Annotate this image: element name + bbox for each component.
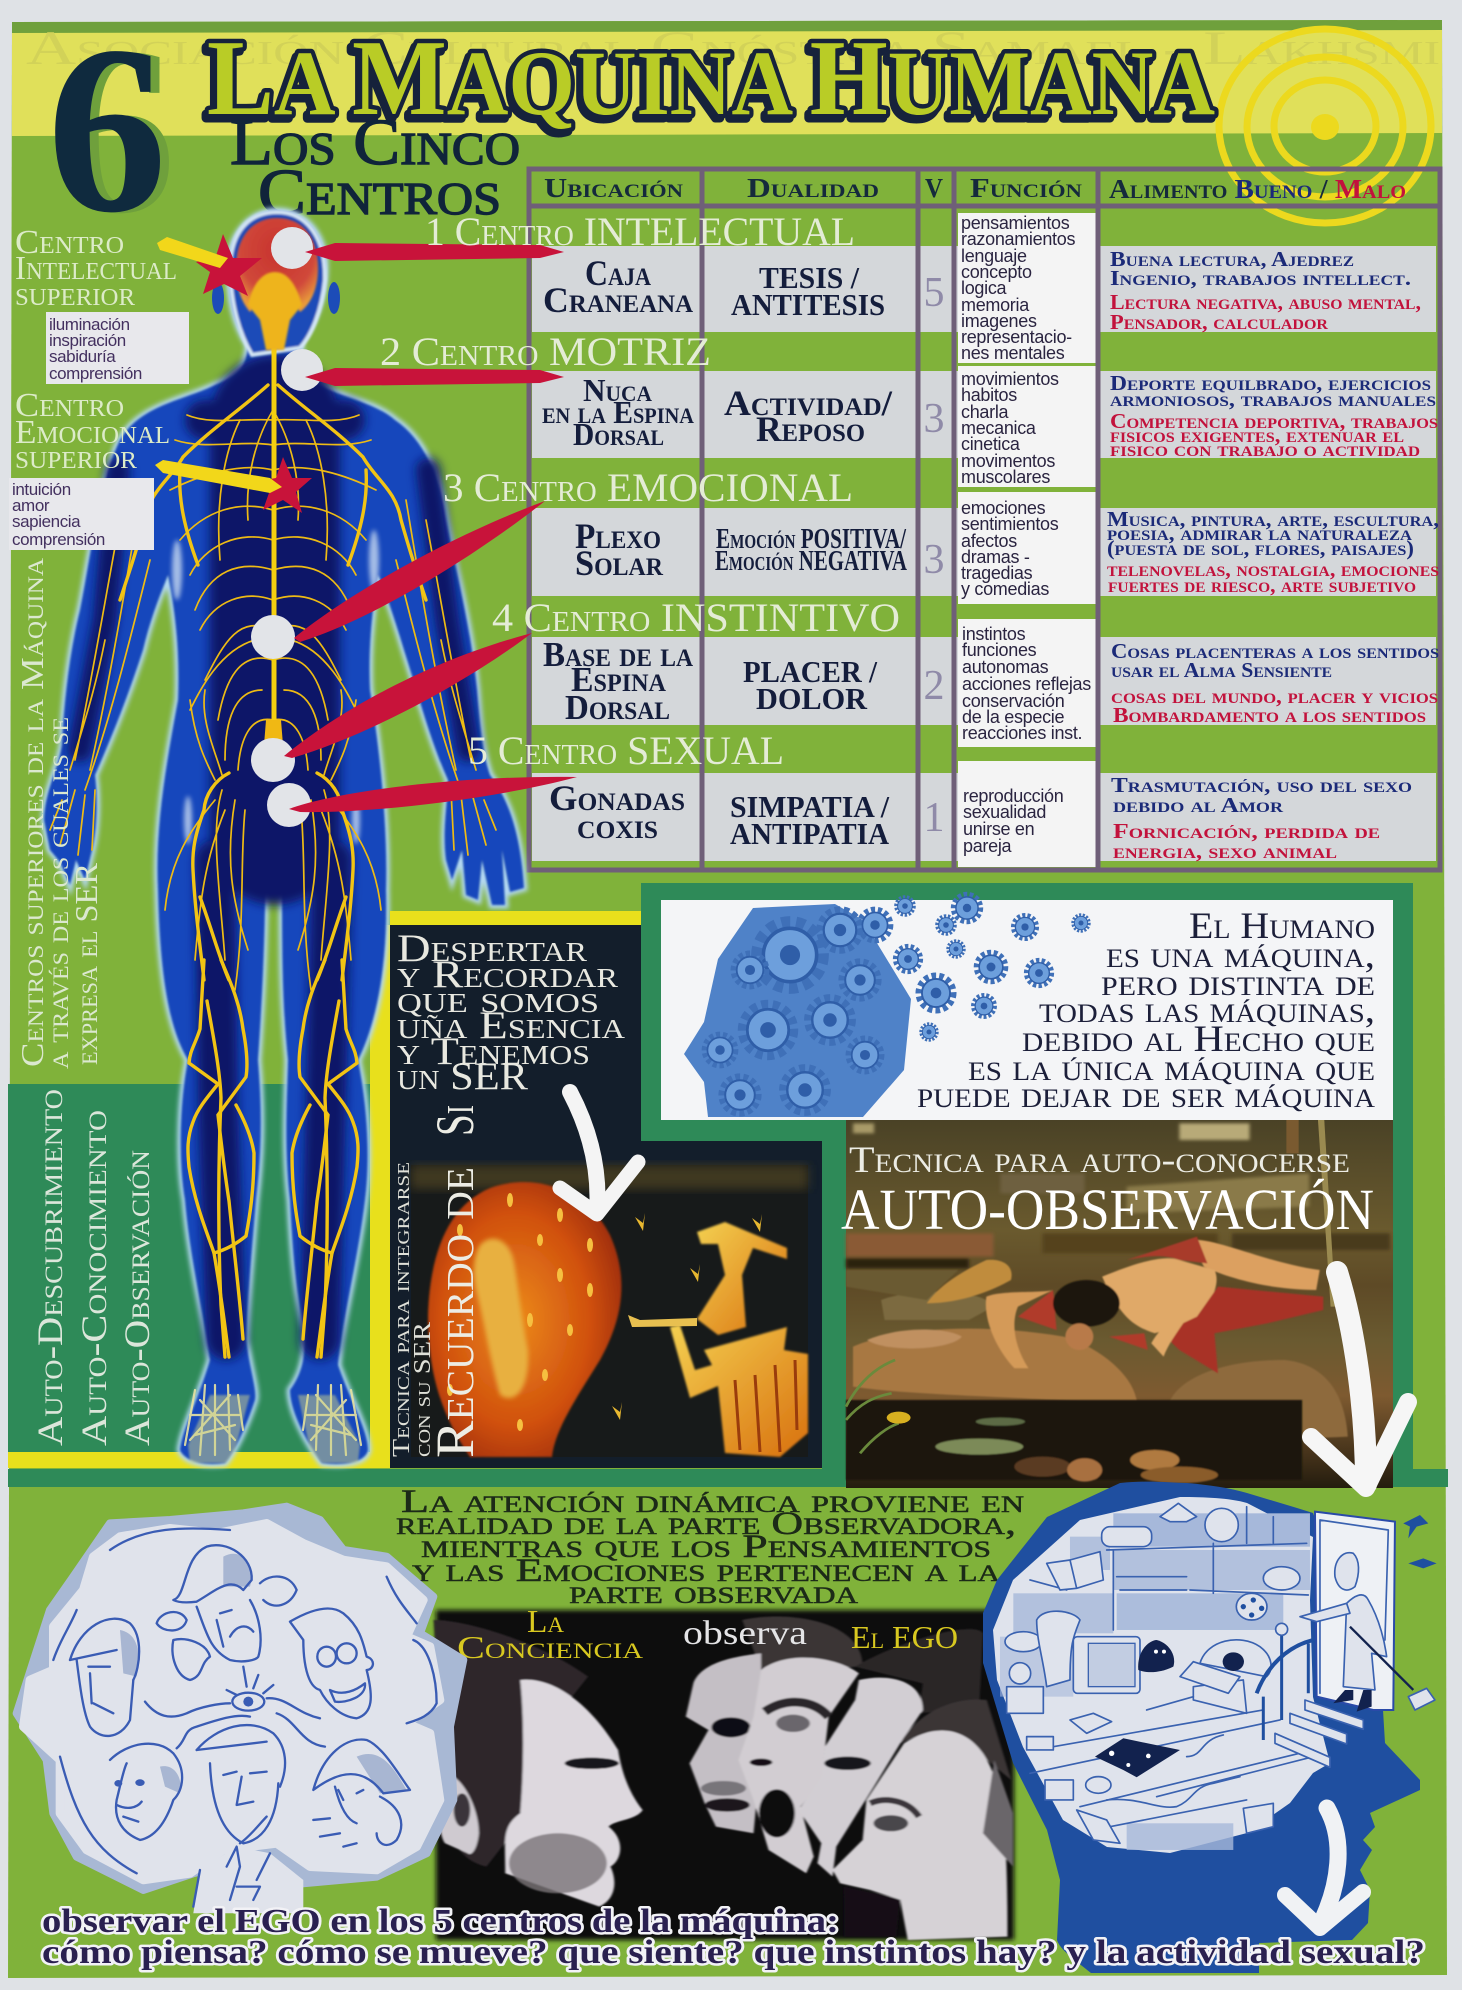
horn — [628, 1315, 697, 1327]
vertical text: auto-conocimiento: Auto-Observación — [117, 1150, 157, 1446]
row 3: fuertes de riesco, arte subjetivo — [1108, 573, 1416, 597]
floor debris — [1027, 1697, 1273, 1843]
box: cualidades emocionales: intuición — [12, 480, 71, 499]
subtitle — [230, 106, 520, 229]
vertical text: centros superiores: Centros superiores de la Máquina — [14, 558, 50, 1067]
row 3: tragedias — [961, 563, 1033, 583]
vertical text: recuerdo de si: Tecnica para integrarse — [389, 1162, 415, 1457]
row 2: movimientos — [961, 369, 1059, 389]
nerve system — [50, 272, 496, 1455]
left label: centro intelectual superior: Centro — [15, 224, 124, 261]
row 4: reacciones inst. — [962, 723, 1082, 743]
row 1: imagenes — [961, 311, 1037, 331]
row 5 — [549, 773, 1412, 863]
row 4: cosas del mundo, placer y vicios — [1111, 684, 1438, 708]
text: el humano: es la única máquina que — [968, 1048, 1375, 1089]
narciso figure — [986, 1237, 1323, 1373]
television — [1073, 1637, 1140, 1693]
feet — [188, 1395, 360, 1463]
row 1: pensamientos — [961, 213, 1070, 233]
table — [529, 169, 1440, 870]
cloud fill — [23, 1523, 440, 1880]
table header: Función — [970, 173, 1082, 203]
row 1: Lectura negativa, abuso mental, — [1110, 290, 1421, 314]
row 2: muscolares — [961, 467, 1050, 487]
row 1: ANTITESIS — [731, 287, 885, 322]
row 3: Plexo — [575, 516, 661, 556]
text: atencion dinamica: mientras que los Pensamientos — [421, 1529, 991, 1565]
numeral 6: 6 — [47, 0, 167, 262]
center dots — [251, 227, 323, 827]
box: cualidades intelectuales: inspiración — [49, 331, 126, 350]
left label: centro emocional superior: Emocional — [15, 414, 170, 451]
right edge strip — [1393, 1469, 1448, 1487]
head silhouette — [983, 1482, 1420, 1973]
text: el humano: todas las máquinas, — [1039, 990, 1375, 1031]
left label: centro emocional superior: Centro — [15, 387, 124, 424]
icon: red stars — [196, 234, 312, 513]
row 1: TESIS / — [759, 260, 859, 295]
bear and stool — [1005, 1611, 1080, 1713]
row 4: acciones reflejas — [962, 674, 1091, 694]
row 1: 5 — [924, 270, 944, 316]
text: despertar: y Recordar — [397, 953, 618, 996]
row 3: afectos — [961, 531, 1017, 551]
dress stripes — [735, 1360, 797, 1452]
row 1: representacio- — [961, 327, 1072, 347]
row 4 — [543, 624, 1439, 743]
text: despertar — [397, 927, 626, 1098]
panel: auto-descubrimiento background — [8, 1084, 370, 1452]
left label: centro intelectual superior — [15, 224, 177, 313]
trunks — [1286, 1120, 1336, 1307]
shaded shelves — [1000, 1513, 1310, 1850]
table header: Dualidad — [747, 173, 879, 203]
cloud outline — [53, 1528, 437, 1873]
row 2: Dorsal — [573, 416, 664, 452]
red arrows to centers — [284, 243, 577, 812]
left label: centro intelectual superior: Intelectual — [15, 250, 177, 287]
painting: narciso — [841, 1120, 1393, 1488]
orange tree with woman — [428, 1182, 621, 1457]
stairs — [1275, 1700, 1363, 1767]
center labels: 3 Centro EMOCIONAL — [443, 465, 853, 510]
text: el ego: El EGO — [851, 1619, 958, 1655]
tree leaves — [447, 1193, 593, 1431]
rail — [1257, 1623, 1313, 1740]
subtitle: Los Cinco — [230, 106, 520, 179]
vertical text: auto-conocimiento — [30, 1089, 157, 1446]
row 5: coxis — [577, 806, 658, 846]
door frame — [1320, 1520, 1388, 1693]
black creature — [1138, 1640, 1174, 1672]
vertical text: centros superiores: a través de los cuales se — [39, 717, 75, 1069]
row 3: poesia, admirar la naturaleza — [1107, 521, 1412, 545]
face: lower right laughing — [313, 1740, 410, 1847]
row 1: Buena lectura, Ajedrez — [1110, 247, 1354, 271]
row 3: Emoción NEGATIVA — [715, 546, 908, 577]
row 5: Gonadas — [549, 778, 685, 818]
row 1: logica — [961, 278, 1008, 298]
row 5: Trasmutación, uso del sexo — [1111, 773, 1412, 797]
row 3: telenovelas, nostalgia, emociones — [1107, 557, 1439, 581]
text: auto-observación — [841, 1140, 1374, 1242]
face: left sad — [70, 1619, 139, 1736]
row 5: reproducción — [963, 786, 1063, 806]
text: el humano: pero distinta de — [1101, 963, 1375, 1004]
text: el humano: es una máquina, — [1106, 935, 1375, 976]
yellow border — [8, 925, 390, 1468]
row 3: (puesta de sol, flores, paisajes) — [1107, 536, 1414, 560]
row 2: Reposo — [756, 409, 865, 449]
row 3: emociones — [961, 498, 1046, 518]
row 3: dramas - — [961, 547, 1030, 567]
face: lower left laughing — [110, 1744, 182, 1840]
text: auto-observación: Tecnica para auto-conocerse — [849, 1140, 1350, 1181]
panel: green frame — [641, 883, 1413, 1470]
illustration: cloud of faces — [17, 1507, 463, 1913]
eye symbol with lines — [145, 1667, 325, 1748]
title: LA MAQUINA HUMANA — [207, 19, 1215, 138]
loose gears — [895, 894, 1089, 1040]
echo figure — [927, 1260, 1012, 1303]
row 2: Actividad/ — [724, 383, 893, 423]
black spill — [1095, 1738, 1180, 1777]
row 4: usar el Alma Sensiente — [1111, 658, 1332, 682]
box: cualidades emocionales: sapiencia — [12, 512, 81, 531]
row 2: Nuca — [583, 372, 652, 408]
text: atencion dinamica: y las Emociones pertenecen a la — [412, 1553, 1001, 1589]
box: cualidades emocionales: amor — [12, 496, 50, 515]
row 4: funciones — [962, 640, 1037, 660]
left label: centro emocional superior — [15, 387, 170, 476]
row 2: charla — [961, 402, 1010, 422]
illustration: head with cluttered mind — [983, 1482, 1437, 1973]
text: despertar: uña Esencia — [397, 1004, 626, 1047]
trees and light — [846, 1123, 1390, 1268]
box: cualidades intelectuales: comprensión — [49, 364, 142, 383]
bottom text: observar el EGO en los 5 centros de la máquina: — [42, 1903, 839, 1940]
ears — [212, 282, 340, 314]
tire and box — [1180, 1640, 1271, 1713]
row 3 — [575, 498, 1439, 599]
row 5: debido al Amor — [1113, 793, 1283, 817]
photo faces — [434, 1616, 1013, 1940]
row 1 — [543, 213, 1421, 363]
text: el humano: El Humano — [1189, 906, 1375, 947]
photo: la conciencia observa el ego — [434, 1603, 1014, 1940]
row 2: 3 — [924, 396, 944, 442]
text: atencion dinamica: realidad de la parte Observadora, — [396, 1506, 1016, 1542]
arrow: head — [1285, 1808, 1363, 1928]
lower dark green strip — [8, 1469, 1448, 1487]
row 3: 3 — [924, 537, 944, 583]
horn player body — [670, 1325, 808, 1457]
tv screen — [1088, 1643, 1135, 1687]
watermark: Asociación Cultural Gnóstica Samael - Lakhsmi — [26, 22, 1440, 75]
birds — [1403, 1515, 1437, 1568]
row 4: conservación — [962, 691, 1064, 711]
row 2: mecanica — [961, 418, 1037, 438]
text: atencion dinamica: parte observada — [569, 1575, 859, 1611]
row 1: lenguaje — [961, 246, 1027, 266]
table header: Alimento Bueno / Malo — [1109, 174, 1406, 204]
lamp — [1160, 1503, 1197, 1522]
row 5: ANTIPATIA — [730, 816, 890, 851]
bottom text — [42, 1903, 1425, 1971]
row 1: nes mentales — [961, 343, 1065, 363]
row 4: instintos — [962, 624, 1026, 644]
flank highlights — [172, 530, 379, 844]
row 1: Ingenio, trabajos intellect. — [1110, 266, 1411, 290]
mind interior — [993, 1497, 1330, 1853]
row 2: armoniosos, trabajos manuales — [1110, 387, 1436, 411]
row 5: sexualidad — [963, 802, 1046, 822]
row 5: unirse en — [963, 819, 1034, 839]
row 1: Craneana — [543, 280, 693, 320]
text: despertar: un SER — [397, 1055, 528, 1098]
left label: centro intelectual superior: superior — [15, 276, 135, 313]
row 4: Espina — [571, 660, 666, 699]
left label: centro emocional superior: superior — [15, 439, 137, 476]
box: cualidades intelectuales: iluminación — [49, 315, 130, 334]
painting: recuerdo de si — [411, 1165, 808, 1457]
icon: gear head — [684, 894, 1089, 1117]
row 5: pareja — [963, 836, 1013, 856]
globe — [1205, 1508, 1238, 1542]
row 1: razonamientos — [961, 229, 1075, 249]
table frame — [529, 169, 1440, 870]
box: cualidades emocionales — [9, 478, 154, 550]
row 2: cinetica — [961, 434, 1021, 454]
panel: despertar — [390, 925, 822, 1468]
table header: Ubicación — [544, 173, 683, 203]
box: cualidades emocionales: comprensión — [12, 530, 105, 549]
radio — [1102, 1527, 1152, 1547]
row 5: energia, sexo animal — [1113, 839, 1337, 863]
row 1: Pensador, calculador — [1110, 310, 1328, 334]
box: cualidades intelectuales: sabiduría — [49, 347, 116, 366]
text: la conciencia: Conciencia — [457, 1629, 643, 1665]
function cells — [958, 213, 1096, 867]
vertical text: auto-conocimiento: Auto-Conocimiento — [74, 1110, 114, 1446]
vertical text: recuerdo de si: Si — [425, 1105, 485, 1136]
row 3: sentimientos — [961, 514, 1059, 534]
row 4: Cosas placenteras a los sentidos — [1111, 639, 1439, 663]
row 2: movimentos — [961, 451, 1055, 471]
row 4: de la especie — [962, 707, 1064, 727]
sun circles — [1219, 29, 1431, 223]
woman — [474, 1239, 528, 1398]
row 4: 2 — [924, 663, 944, 709]
row 2: habitos — [961, 385, 1017, 405]
book — [1047, 1552, 1103, 1590]
butterflies — [612, 1213, 762, 1420]
arrow: despertar — [560, 1092, 638, 1214]
subtitle: Centros — [258, 156, 501, 229]
row 1: concepto — [961, 262, 1032, 282]
horn player hat — [697, 1222, 787, 1335]
painting detail — [846, 1120, 1390, 1483]
skull — [1263, 1567, 1300, 1590]
vertical text: recuerdo de si — [389, 1105, 485, 1458]
text: el humano: debido al Hecho que — [1022, 1019, 1375, 1060]
text: despertar: Despertar — [397, 927, 587, 970]
cloud shadow — [17, 1507, 463, 1890]
row 5: 1 — [924, 795, 944, 841]
row 5: Fornicación, perdida de — [1113, 819, 1380, 843]
text: el humano — [917, 906, 1375, 1116]
row 4: PLACER / — [743, 654, 877, 689]
row 2: fisicos exigentes, extenuar el — [1110, 423, 1404, 447]
text: despertar: y Tenemos — [397, 1030, 590, 1073]
human body with nerves — [44, 211, 524, 1464]
center labels: 2 Centro MOTRIZ — [380, 329, 711, 374]
arrow: narciso — [1311, 1272, 1408, 1488]
row 3: Emoción POSITIVA/ — [716, 524, 907, 555]
text: despertar: que somos — [397, 978, 599, 1021]
man in doorway — [1300, 1553, 1435, 1712]
brain — [236, 218, 318, 312]
floor planks — [1030, 1710, 1313, 1827]
rocks — [846, 1270, 1348, 1438]
row 2: fisico con trabajo o actividad — [1110, 437, 1420, 461]
text: el humano: puede dejar de ser máquina — [917, 1075, 1375, 1116]
row 4: Base de la — [543, 635, 693, 674]
face: center thinker — [197, 1725, 285, 1843]
table header: V — [925, 173, 943, 203]
box: cualidades intelectuales — [46, 312, 189, 384]
table header — [544, 173, 1406, 204]
yellow pointers — [155, 237, 282, 493]
row 3: Solar — [575, 543, 664, 583]
text: atencion dinamica: La atención dinámica proviene en — [401, 1484, 1025, 1520]
row 2 — [542, 369, 1438, 487]
text: observa: observa — [683, 1615, 807, 1652]
row 4: Bombardamento a los sentidos — [1113, 703, 1426, 727]
iris and reeds — [846, 1360, 911, 1453]
row 1: memoria — [961, 295, 1030, 315]
row 4: DOLOR — [756, 681, 868, 716]
bottom text: cómo piensa? cómo se mueve? que siente? que instintos hay? y la actividad sexual? — [42, 1934, 1425, 1971]
row 2: Deporte equilbrado, ejercicios — [1110, 371, 1431, 395]
head rim — [230, 212, 325, 355]
text: la conciencia: La — [527, 1603, 564, 1639]
vertical text: centros superiores — [14, 558, 104, 1069]
center labels: 5 Centro SEXUAL — [468, 728, 784, 773]
face: top angry — [157, 1545, 297, 1680]
vertical text: recuerdo de si: con su SER — [410, 1322, 436, 1457]
dark body shading — [80, 420, 468, 1340]
photo background — [436, 1610, 1014, 1940]
top band — [12, 20, 1442, 136]
row 3: y comedias — [961, 579, 1049, 599]
shelves — [1030, 1507, 1308, 1630]
door — [1315, 1512, 1395, 1710]
spotted ball — [1236, 1593, 1267, 1620]
body silhouette rim — [44, 211, 524, 1464]
row 1: Caja — [585, 253, 651, 293]
row cells — [532, 246, 1436, 861]
row 4: autonomas — [962, 657, 1049, 677]
numeral 6: 6 — [56, 0, 176, 263]
row 5: SIMPATIA / — [730, 789, 889, 824]
panel: el humano — [661, 894, 1393, 1120]
row 2: en la Espina — [542, 394, 694, 430]
text: la conciencia — [457, 1603, 643, 1665]
face: right scared — [290, 1608, 373, 1718]
row 3: Musica, pintura, arte, escultura, — [1107, 507, 1439, 531]
row 2: Competencia deportiva, trabajos — [1110, 409, 1438, 433]
center labels: 4 Centro INSTINTIVO — [492, 595, 900, 640]
vertical text: recuerdo de si: Recuerdo de — [425, 1167, 485, 1458]
clutter — [1000, 1503, 1437, 1850]
row 4: Dorsal — [565, 688, 670, 727]
text: atencion dinamica — [396, 1484, 1025, 1611]
pond — [846, 1400, 1302, 1483]
text: auto-observación: AUTO-OBSERVACIÓN — [841, 1177, 1374, 1242]
vertical text: auto-conocimiento: Auto-Descubrimiento — [30, 1089, 70, 1446]
center labels: 1 Centro INTELECTUAL — [425, 209, 855, 254]
thinker shirt — [193, 1847, 303, 1913]
center labels — [380, 209, 900, 773]
yellow top strip — [390, 911, 641, 925]
vertical text: centros superiores: expresa el SER — [68, 862, 104, 1065]
body silhouette fill — [44, 211, 524, 1464]
